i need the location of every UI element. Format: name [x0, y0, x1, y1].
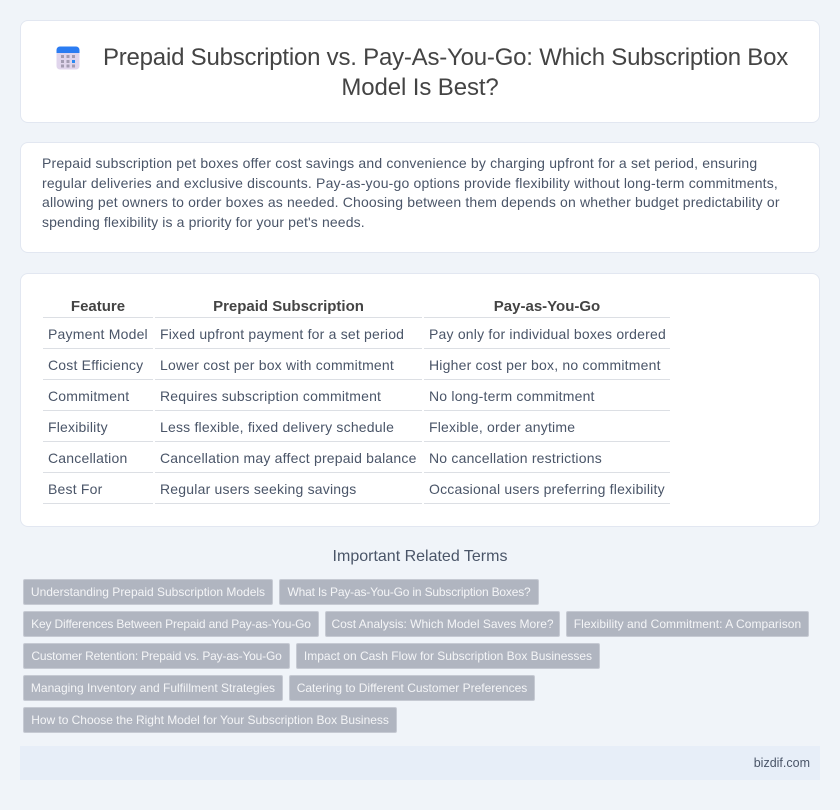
comparison table: Pay-as-You-Go — [494, 298, 600, 314]
footer — [20, 746, 820, 780]
tag list: related terms — [23, 579, 809, 733]
comparison table: Best For — [48, 481, 103, 497]
tag list: related terms: How to Choose the Right Model for Your Subscription Box Business — [31, 713, 389, 727]
comparison table: Occasional users preferring flexibility — [429, 481, 665, 497]
panel: description — [20, 142, 820, 253]
comparison table: Feature — [71, 298, 125, 314]
comparison table: Flexible, order anytime — [429, 419, 575, 435]
tag list: related terms: Managing Inventory and Fulfillment Strategies — [31, 681, 275, 695]
tag list: related terms: Flexibility and Commitment: A Comparison — [574, 617, 801, 631]
comparison table: Payment Model — [48, 326, 148, 342]
tag list: related terms: Catering to Different Customer Preferences — [297, 681, 527, 695]
comparison table — [43, 298, 670, 504]
description text: regular deliveries and exclusive discounts. Pay-as-you-go options provide flexibility without long-term commitments, — [42, 175, 778, 191]
title — [103, 44, 788, 101]
heading: related terms: Important Related Terms — [333, 548, 507, 565]
description text: allowing pet owners to order boxes as needed. Choosing between them depends on whether budget predictability or — [42, 194, 780, 210]
comparison table: Higher cost per box, no commitment — [429, 357, 661, 373]
tag list: related terms: Cost Analysis: Which Model Saves More? — [331, 617, 554, 631]
tag list: related terms: Impact on Cash Flow for Subscription Box Businesses — [304, 649, 592, 663]
comparison table: Commitment — [48, 388, 129, 404]
comparison table: Cancellation — [48, 450, 127, 466]
comparison table: Prepaid Subscription — [213, 298, 364, 314]
title: Model Is Best? — [341, 74, 499, 101]
footer: bizdif.com — [754, 756, 810, 770]
comparison table: Regular users seeking savings — [160, 481, 356, 497]
description text: Prepaid subscription pet boxes offer cost savings and convenience by charging upfront for a set period, ensuring — [42, 155, 757, 171]
comparison table: Lower cost per box with commitment — [160, 357, 394, 373]
comparison table: Cancellation may affect prepaid balance — [160, 450, 417, 466]
description text: spending flexibility is a priority for your pet's needs. — [42, 214, 365, 230]
comparison table: No long-term commitment — [429, 388, 595, 404]
comparison table: Cost Efficiency — [48, 357, 143, 373]
panel: header — [20, 20, 820, 123]
comparison table: Fixed upfront payment for a set period — [160, 326, 404, 342]
icon: calendar — [56, 46, 80, 70]
tag list: related terms: Key Differences Between Prepaid and Pay-as-You-Go — [31, 617, 311, 631]
comparison table: Requires subscription commitment — [160, 388, 381, 404]
panel: comparison table — [20, 273, 820, 527]
tag list: related terms: What Is Pay-as-You-Go in Subscription Boxes? — [287, 585, 531, 599]
comparison table: Flexibility — [48, 419, 108, 435]
tag list: related terms: Understanding Prepaid Subscription Models — [31, 585, 265, 599]
comparison table: Less flexible, fixed delivery schedule — [160, 419, 394, 435]
description text — [42, 155, 780, 230]
tag list: related terms: Customer Retention: Prepaid vs. Pay-as-You-Go — [31, 649, 282, 663]
title: Prepaid Subscription vs. Pay-As-You-Go: Which Subscription Box — [103, 44, 788, 71]
comparison table: No cancellation restrictions — [429, 450, 602, 466]
comparison table: Pay only for individual boxes ordered — [429, 326, 666, 342]
